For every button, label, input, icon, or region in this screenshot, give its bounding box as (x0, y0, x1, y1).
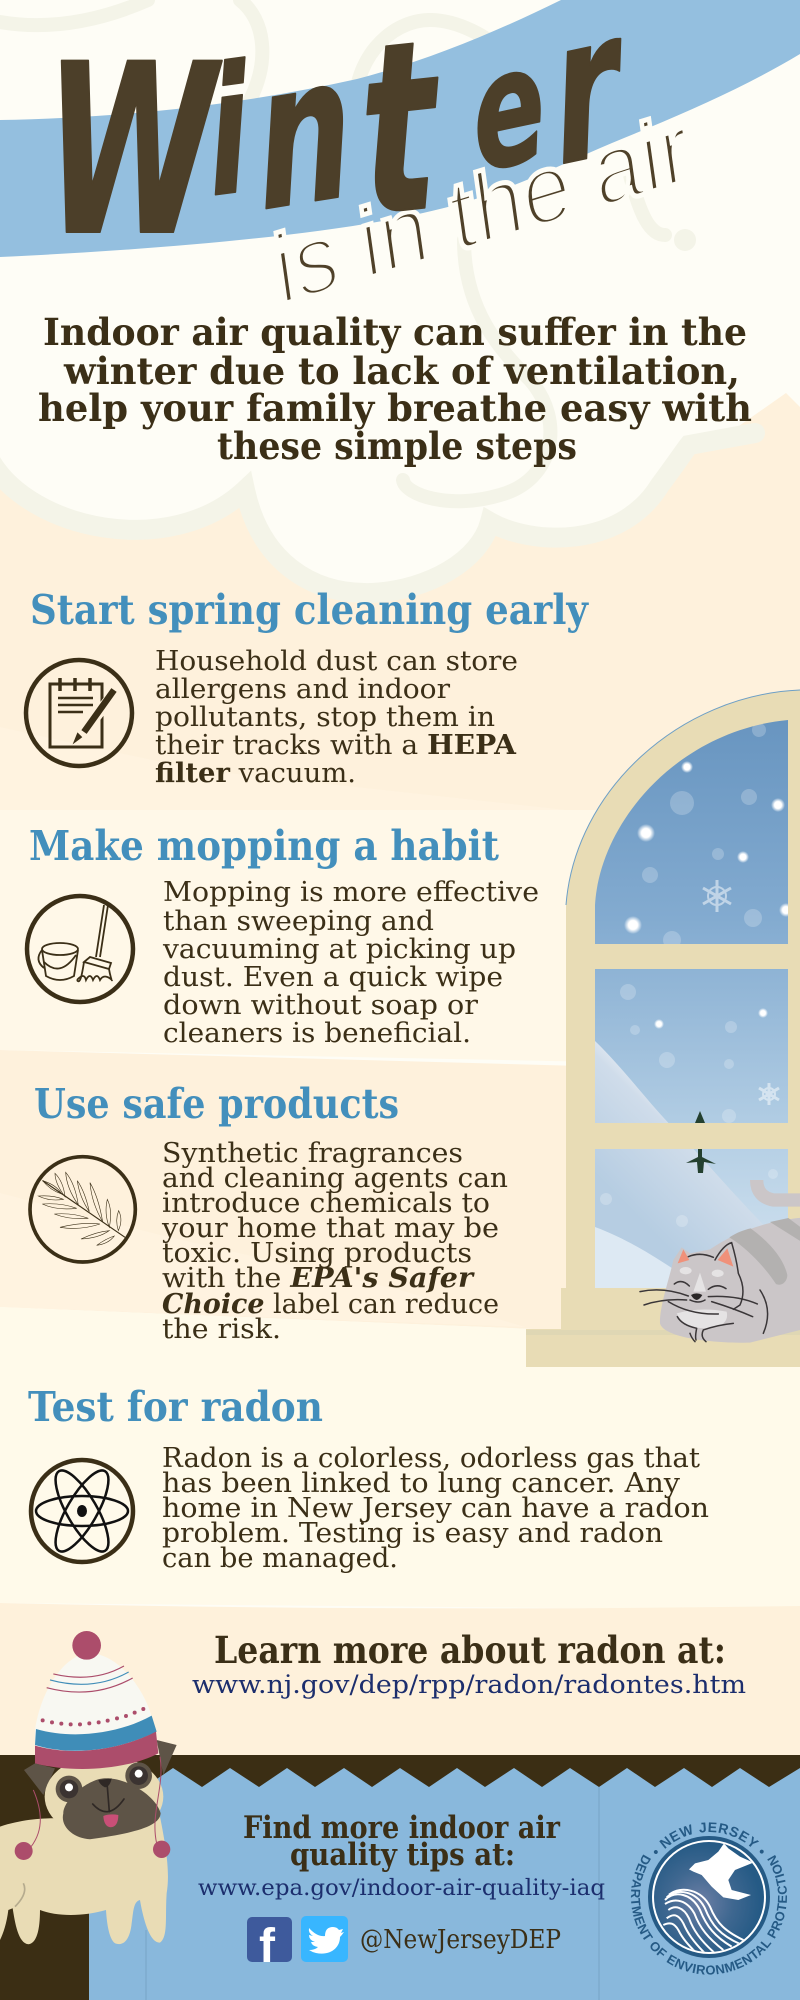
section: use safe products (30, 1080, 508, 1345)
body text: toxic. Using products (162, 1238, 472, 1269)
callout: find more indoor air quality tips: Find more indoor air (243, 1810, 561, 1846)
body text: Choice label can reduce (162, 1289, 499, 1320)
heading: Test for radon (28, 1383, 323, 1431)
social handle: @NewJerseyDEP (360, 1925, 561, 1955)
knit hat (15, 1631, 170, 1860)
window frame (566, 690, 800, 1288)
icon: mop and bucket (27, 896, 133, 1002)
intro paragraph: winter due to lack of ventilation, (63, 349, 740, 393)
body text: Household dust can store (155, 646, 518, 677)
heading: Start spring cleaning early (30, 586, 589, 634)
logo: NJ Department of Environmental Protection: • NEW JERSEY • (654, 1822, 764, 1854)
callout: find more indoor air quality tips: quality tips at: (290, 1837, 515, 1873)
snowy panes (595, 720, 788, 1288)
icon: facebook (247, 1917, 292, 1973)
section: make mopping a habit (27, 822, 539, 1049)
icon: atom (31, 1460, 133, 1562)
section: start spring cleaning early (26, 586, 589, 789)
subtitle: is in the air: is in the air (268, 91, 696, 326)
icon: fern leaf (30, 1157, 135, 1262)
heading: Make mopping a habit (29, 822, 499, 870)
intro paragraph (38, 310, 752, 468)
illustration: pug in hat (0, 1631, 177, 1944)
body text: the risk. (162, 1314, 281, 1345)
body text: than sweeping and (163, 906, 434, 937)
title: Winter: n (249, 10, 359, 256)
body text: with the EPA's Safer (162, 1263, 475, 1294)
body text: cleaners is beneficial. (163, 1018, 471, 1049)
callout: find more indoor air quality tips: www.epa.gov/indoor-air-quality-iaq (198, 1876, 605, 1901)
callout: learn more about radon: Learn more about radon at: (214, 1628, 726, 1672)
body text (155, 646, 518, 789)
intro paragraph: Indoor air quality can suffer in the (43, 310, 747, 354)
footer background (0, 1755, 800, 2000)
callout: learn more about radon: www.nj.gov/dep/rpp/radon/radontes.htm (192, 1670, 746, 1699)
body text: home in New Jersey can have a radon (162, 1493, 709, 1524)
callout: find more indoor air quality tips (198, 1810, 605, 1901)
intro paragraph: help your family breathe easy with (38, 386, 752, 430)
panel: window with snowy scene (526, 690, 800, 1367)
body text: pollutants, stop them in (155, 702, 495, 733)
icon: facebook: f (259, 1920, 276, 1973)
body text: their tracks with a HEPA (155, 730, 517, 761)
icon: notepad and pencil (26, 660, 132, 766)
body text: has been linked to lung cancer. Any (162, 1468, 681, 1499)
title: Winter: e (464, 9, 552, 208)
logo: NJ Department of Environmental Protection: DEPARTMENT OF ENVIRONMENTAL PROTECTION (630, 1854, 787, 1975)
icon: twitter (301, 1916, 348, 1962)
body text: can be managed. (162, 1543, 398, 1574)
title: Winter: W (45, 14, 222, 287)
blue curved band (0, 0, 800, 257)
body text: Mopping is more effective (163, 877, 539, 908)
body text: down without soap or (163, 990, 478, 1021)
body text (162, 877, 539, 1049)
callout: learn more about radon (192, 1628, 746, 1699)
body text: your home that may be (161, 1213, 499, 1244)
body text: problem. Testing is easy and radon (162, 1518, 663, 1549)
body text (161, 1138, 508, 1345)
body text: Synthetic fragrances (162, 1138, 463, 1169)
illustration: sleeping cat (640, 1180, 800, 1343)
pug head (24, 1740, 177, 1839)
body text: introduce chemicals to (162, 1188, 490, 1219)
cloud background (0, 0, 800, 593)
section: test for radon (28, 1383, 709, 1574)
body text: vacuuming at picking up (162, 934, 516, 965)
heading: Use safe products (34, 1080, 399, 1128)
body text (162, 1443, 709, 1574)
body text: dust. Even a quick wipe (163, 962, 503, 993)
intro paragraph: these simple steps (217, 424, 577, 468)
body text: allergens and indoor (155, 674, 450, 705)
body text: filter vacuum. (155, 758, 356, 789)
body text: Radon is a colorless, odorless gas that (162, 1443, 700, 1474)
pug body (0, 1817, 168, 1944)
title: Winter: i (202, 27, 255, 236)
body text: and cleaning agents can (162, 1163, 508, 1194)
window sill (561, 1288, 800, 1330)
